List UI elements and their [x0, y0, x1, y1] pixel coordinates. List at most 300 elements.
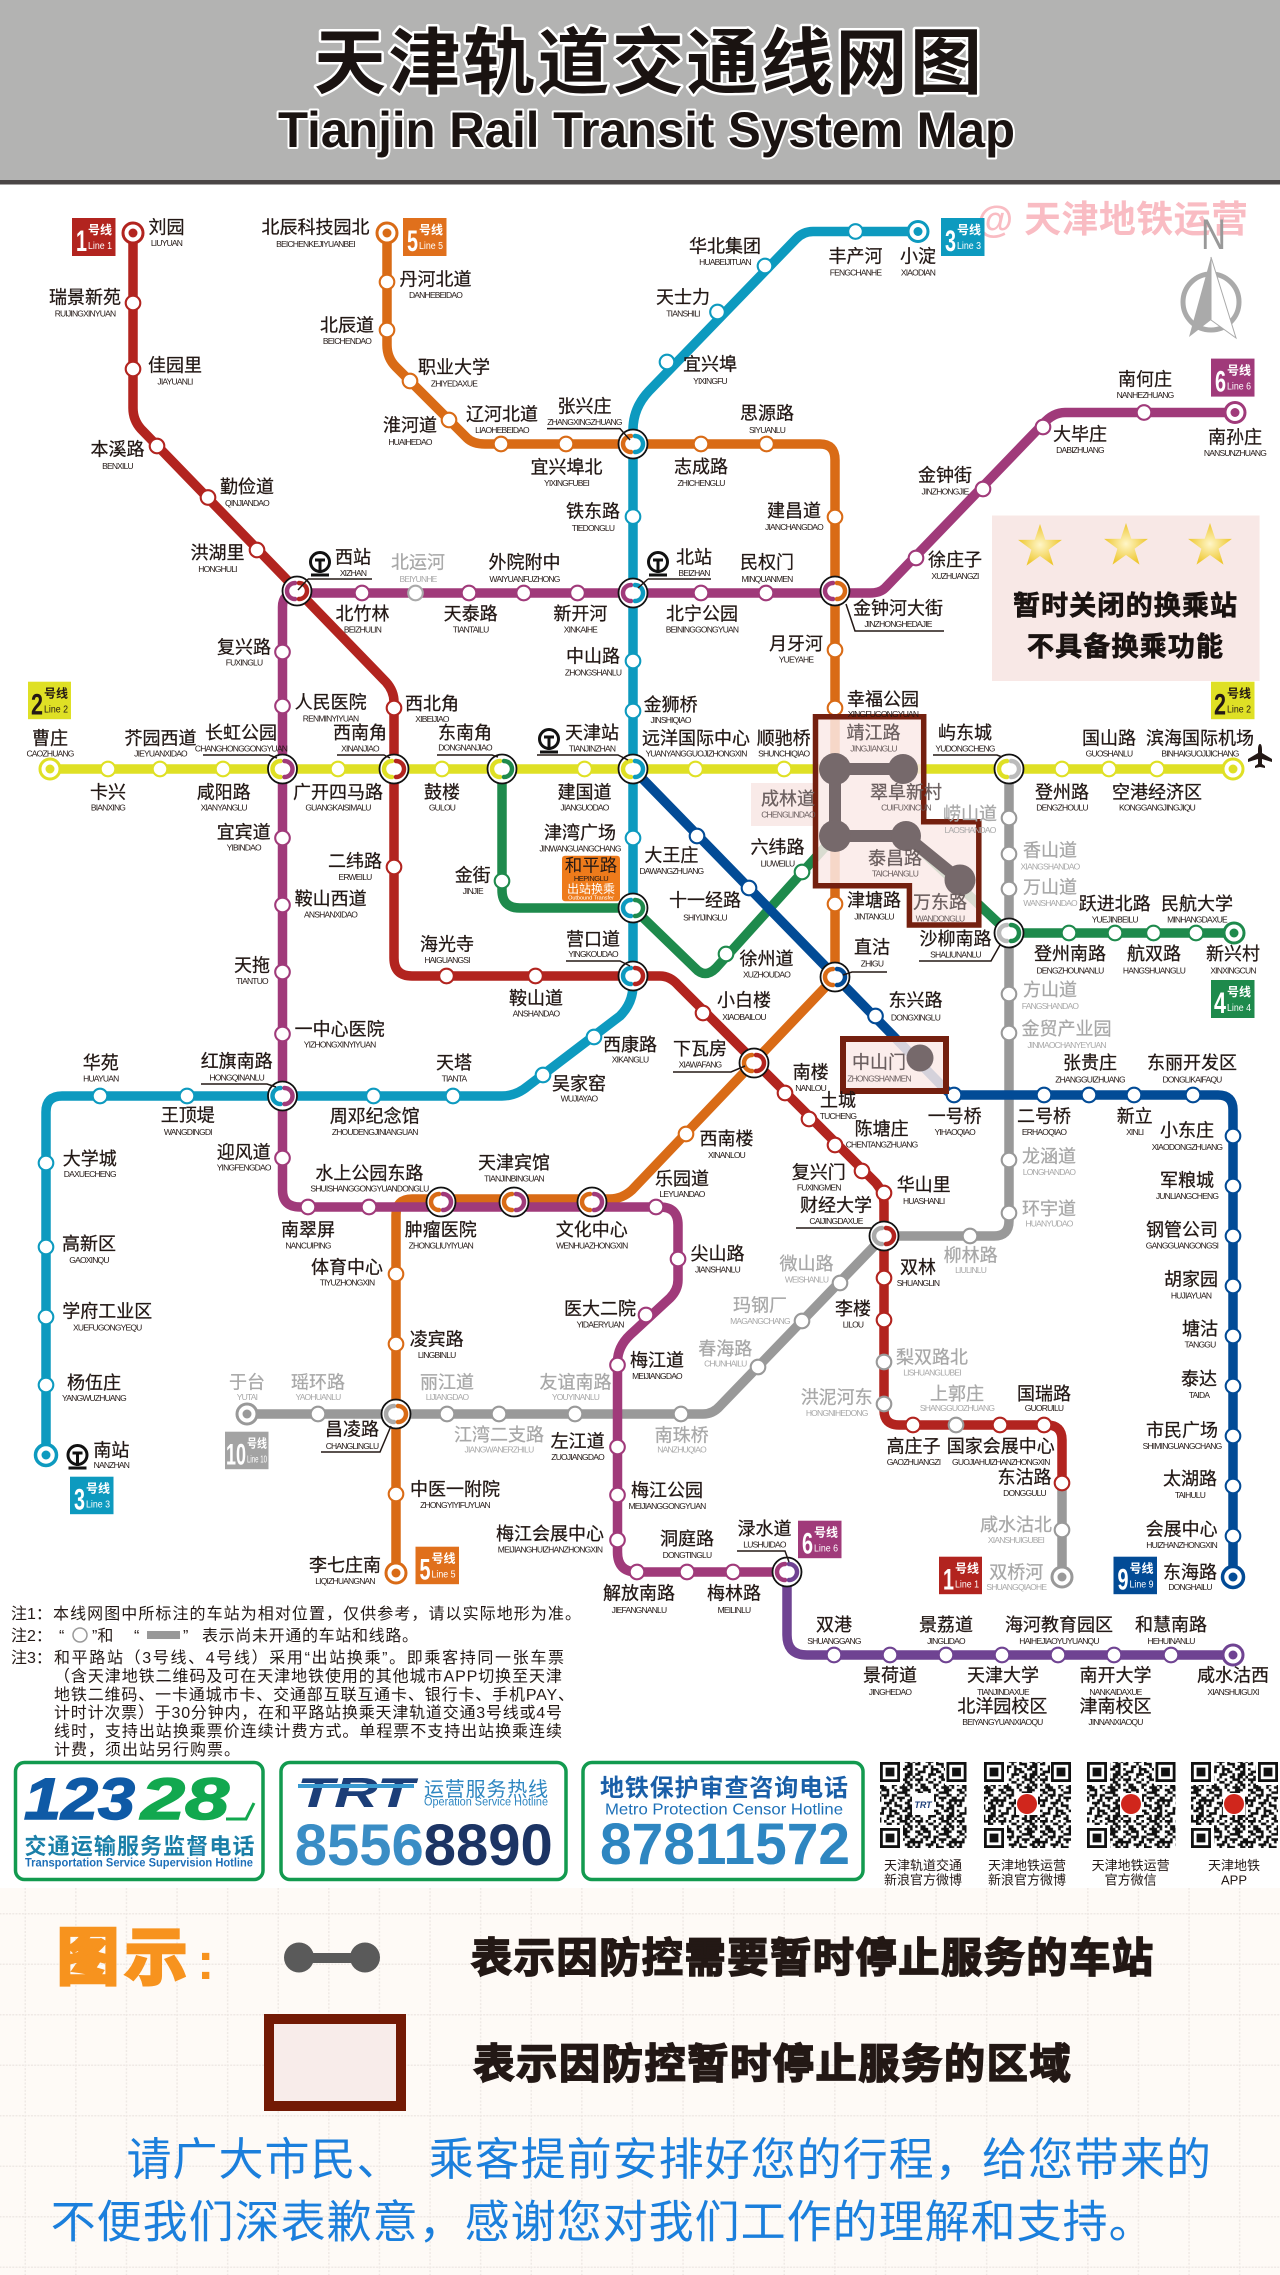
station labels: line 1: 瑞景新苑: [49, 288, 121, 308]
station labels: line 1: BENXILU: [102, 461, 134, 471]
station labels: line 5: LIQIZHUANGNAN: [315, 1576, 375, 1586]
和平路 transfer tag: [562, 856, 620, 902]
badge: line 10: [225, 1432, 268, 1472]
station labels: line 10: JINMAOCHANYEYUAN: [1027, 1040, 1106, 1050]
station labels: line 3: YIXINGFU: [693, 376, 728, 386]
station labels: line 4: 成林道: [761, 789, 815, 809]
station labels: line 2: GUANGKAISIMALU: [305, 803, 371, 813]
badge: line 6 south: 号线: [814, 1525, 838, 1540]
station labels: line 6: ZUOJIANGDAO: [551, 1452, 605, 1462]
legend heading: :: [197, 1933, 214, 1991]
icon: three gold stars: [1018, 523, 1232, 566]
line 1 (red): [123, 223, 1072, 1587]
notes: 表示尚未开通的车站和线路。: [202, 1627, 418, 1645]
station labels: line 9: 二号桥: [1017, 1106, 1071, 1126]
station labels: line 5: 体育中心: [311, 1258, 383, 1278]
station labels: line 1: 营口道: [566, 930, 620, 950]
station labels: line 10: 环宇道: [1022, 1199, 1076, 1219]
badge: line 9: 9: [1118, 1564, 1128, 1597]
和平路 transfer tag: 和平路: [565, 856, 618, 876]
station labels: line 9: HUIZHANZHONGXIN: [1146, 1540, 1218, 1550]
station labels: line 5: 宜兴埠北: [530, 458, 602, 478]
notice text: [51, 2134, 1212, 2248]
notice text: 给您带来的: [982, 2134, 1212, 2185]
QR code: rail transit weibo: 新浪官方微博: [884, 1872, 962, 1888]
station labels: line 2: KONGGANGJINGJIQU: [1119, 803, 1196, 813]
station labels: line 3: 西康路: [603, 1035, 657, 1055]
station labels: line 5: 月牙河: [769, 634, 823, 654]
station labels: line 6: 双港: [816, 1615, 852, 1635]
panel: metro protection hotline: 地铁保护审查咨询电话: [600, 1775, 848, 1802]
station labels: line 10: LONGHANDAO: [1023, 1167, 1076, 1177]
station labels: line 4: DENGZHOUNANLU: [1036, 965, 1104, 975]
station labels: line 5: 北辰道: [320, 316, 374, 336]
station labels: line 1: ANSHANDAO: [513, 1009, 561, 1019]
panel: legend and notice background: [0, 1888, 1280, 2275]
no transfer text: 不具备换乘功能: [1027, 632, 1223, 662]
station labels: line 4: 徐州道: [740, 949, 794, 969]
station labels: line 9: SHIYIJINGLU: [683, 913, 727, 923]
badge: line 6: 6: [1215, 366, 1226, 399]
station labels: line 3: 王顶堤: [161, 1106, 215, 1126]
station labels: line 3: 金狮桥: [644, 695, 698, 715]
station labels: line 3: 北站: [676, 548, 712, 568]
badge: line 6: [1211, 359, 1254, 399]
notes: [11, 1605, 581, 1759]
station labels: line 5: 辽河北道: [466, 404, 538, 424]
QR code: metro weibo: [982, 1760, 1074, 1888]
station labels: line 2: GUOSHANLU: [1086, 749, 1133, 759]
station labels: line 6: ANSHANXIDAO: [304, 910, 358, 920]
station labels: line 6: SHUANGGANG: [807, 1636, 861, 1646]
station labels: line 6: JIEFANGNANLU: [612, 1605, 667, 1615]
station labels: line 9: 张贵庄: [1063, 1053, 1117, 1073]
station labels: line 6: JINGHEDAO: [869, 1687, 912, 1697]
notes: 计费，须出站另行购票。: [54, 1741, 240, 1759]
station labels: line 3: 小淀: [900, 246, 936, 266]
station labels: line 3: YANGWUZHUANG: [62, 1393, 126, 1403]
station labels: line 4: 万东路: [913, 892, 967, 912]
station labels: line 9: 小东庄: [1160, 1120, 1214, 1140]
panel: metro protection hotline: 87811572: [600, 1812, 850, 1877]
station labels: line 10: XIANGSHANDAO: [1021, 861, 1081, 871]
station labels: line 6: 金钟街: [918, 466, 972, 486]
station labels: line 9: 泰达: [1181, 1369, 1217, 1389]
station labels: line 1: 高庄子: [886, 1436, 940, 1456]
station labels: line 9: ERHAOQIAO: [1022, 1127, 1067, 1137]
station labels: line 3: XIAODIAN: [901, 268, 936, 278]
station labels: line 4: YUEJINBEILU: [1092, 915, 1138, 925]
station labels: line 6: 景荔道: [919, 1615, 973, 1635]
station labels: line 6: JINGLIDAO: [927, 1636, 966, 1646]
icon: railway station symbols: [68, 552, 668, 1468]
station labels: line 10: LIULINLU: [955, 1265, 987, 1275]
station labels: line 6: 西站: [335, 548, 371, 568]
station labels: line 9: TAIDA: [1189, 1390, 1210, 1400]
station labels: line 2: JINGJIANGLU: [850, 744, 897, 754]
station labels: line 5: 幸福公园: [847, 690, 919, 710]
station labels: line 4: XUZHOUDAO: [743, 970, 791, 980]
station labels: line 5: LINGBINLU: [418, 1350, 456, 1360]
station labels: line 6: 梅江道: [630, 1350, 684, 1370]
station labels: line 6: RENMINYIYUAN: [303, 713, 359, 723]
station labels: line 1: NANLOU: [795, 1083, 827, 1093]
station labels: line 9: DONGXINGLU: [891, 1013, 941, 1023]
icon: airplane: [1248, 744, 1272, 768]
station labels: line 2: 国山路: [1082, 728, 1136, 748]
badge: line 5: Line 5: [419, 241, 443, 252]
station labels: line 6: 渌水道: [738, 1519, 792, 1539]
station labels: line 10: WEISHANLU: [785, 1275, 829, 1285]
badge: line 3 south: 3: [74, 1484, 85, 1517]
station labels: line 6: HEHUINANLU: [1147, 1636, 1195, 1646]
station labels: line 2: 卡兴: [90, 782, 126, 802]
QR code: rail transit weibo: [878, 1760, 969, 1888]
station labels: line 10: CHUNHAILU: [704, 1359, 747, 1369]
badge: line 10: 10: [226, 1439, 246, 1472]
station labels: line 3: 学府工业区: [62, 1302, 152, 1322]
station labels: line 6: FUXINGLU: [226, 658, 263, 668]
panel: closed interchange note: [992, 516, 1260, 681]
badge: line 2 east: 号线: [1227, 686, 1251, 701]
station labels: line 3: 南站: [93, 1440, 129, 1460]
station labels: line 4: SHALIUNANLU: [930, 950, 982, 960]
station labels: line 10: JIANGWANERZHILU: [465, 1445, 534, 1455]
badge: line 3 south: Line 3: [86, 1500, 110, 1511]
station labels: line 3: NANZHAN: [94, 1460, 130, 1470]
station labels: line 6: 南开大学: [1080, 1666, 1152, 1686]
station labels: line 9: DONGHAILU: [1168, 1582, 1212, 1592]
station labels: line 6: YIDAERYUAN: [576, 1320, 624, 1330]
station labels: line 5: 中医一附院: [410, 1480, 500, 1500]
station labels: line 3: BEIZHAN: [678, 568, 710, 578]
station labels: line 1: JIAYUANLI: [157, 377, 193, 387]
closed area: 中山门 box: [843, 1039, 946, 1091]
station labels: line 1: LIUYUAN: [151, 238, 183, 248]
station labels: line 2: 芥园西道: [124, 728, 196, 748]
badge: line 1: Line 1: [88, 241, 112, 252]
station labels: line 6: 迎风道: [217, 1142, 271, 1162]
badge: line 1 south: 号线: [955, 1561, 979, 1576]
station labels: line 2: 靖江路: [846, 723, 900, 743]
station labels: line 6: 梅江公园: [631, 1480, 703, 1500]
station labels: line 6: 人民医院: [295, 692, 367, 712]
badge: line 1: [72, 218, 116, 258]
badge: line 5: 号线: [419, 222, 443, 237]
station labels: line 3: 华苑: [83, 1053, 119, 1073]
legend icon: closed station dumbbell: [284, 1942, 380, 1972]
station labels: line 5: ZHICHENGLU: [677, 478, 725, 488]
station labels: line 5: 文化中心: [556, 1220, 628, 1240]
station labels: line 5: TIANJINBINGUAN: [484, 1174, 544, 1184]
station labels: line 10: FANGSHANDAO: [1022, 1001, 1079, 1011]
interchange stations: [268, 430, 1024, 1586]
station labels: line 10: 龙涵道: [1022, 1146, 1076, 1166]
badge: line 5 south: Line 5: [432, 1570, 456, 1581]
station labels: line 6: 北宁公园: [666, 604, 738, 624]
line 6 (purple): [275, 402, 1245, 1665]
line 5 (orange): [377, 223, 842, 1583]
station labels: line 10: YAOHUANLU: [295, 1392, 341, 1402]
station labels: line 6: XIANSHUIGUXI: [1207, 1687, 1259, 1697]
station labels: line 1: FUXINGMEN: [797, 1183, 841, 1193]
station labels: line 9: 十一经路: [669, 890, 741, 910]
notes: 线时，支持出站换乘票价连续计费方式。单程票不支持出站换乘连续: [54, 1722, 562, 1740]
badge: line 3 south: 号线: [86, 1481, 110, 1496]
station labels: line 2: GULOU: [429, 803, 456, 813]
station labels: line 6: 梅林路: [707, 1584, 761, 1604]
badge: line 2 east: [1211, 682, 1254, 722]
badge: line 10: Line 10: [247, 1455, 267, 1466]
station labels: line 3: 红旗南路: [201, 1052, 273, 1072]
badge: line 2 west: 号线: [44, 686, 68, 701]
QR code: metro app: 天津地铁: [1208, 1858, 1260, 1873]
station labels: line 1: 本溪路: [90, 440, 144, 460]
station labels: line 5: BEICHENKEJIYUANBEI: [276, 239, 355, 249]
QR code: metro app: [1189, 1760, 1280, 1888]
station labels: line 10: YUTAI: [237, 1392, 258, 1402]
station labels: line 5: 凌宾路: [410, 1330, 464, 1350]
和平路 transfer tag: Outbound Transfer: [568, 896, 614, 902]
station labels: line 3: 吴家窑: [552, 1074, 606, 1094]
station labels: line 2: YUANYANGGUOJIZHONGXIN: [645, 749, 747, 759]
station labels: line 5: 西南楼: [700, 1129, 754, 1149]
station labels: line 6: 北运河: [391, 552, 445, 572]
station labels: line 3: 铁东路: [566, 502, 620, 522]
station labels: line 1: 西南角: [333, 723, 387, 743]
station labels: line 1: XIBEIJIAO: [415, 714, 450, 724]
station labels: line 6: 天拖: [234, 956, 270, 976]
station labels: line 4: 金街: [455, 866, 491, 886]
station labels: line 9: SHIMINGUANGCHANG: [1143, 1441, 1222, 1451]
station labels: line 1: 下瓦房: [673, 1039, 727, 1059]
station labels: line 6: 左江道: [551, 1432, 605, 1452]
station labels: line 3: [62, 236, 936, 1470]
station labels: line 1: 国瑞路: [1017, 1384, 1071, 1404]
station labels: line 2: 翠阜新村: [870, 782, 942, 802]
station labels: line 6: BEIYANGYUANXIAOQU: [962, 1717, 1043, 1727]
station labels: line 1: HONGNIHEDONG: [806, 1408, 868, 1418]
station labels: line 6: MEIJIANGGONGYUAN: [629, 1501, 706, 1511]
station labels: line 6: MEIJIANGHUIZHANZHONGXIN: [498, 1545, 603, 1555]
legend icon: closed area box: [269, 2019, 401, 2106]
station labels: line 2: 顺驰桥: [757, 728, 811, 748]
station labels: line 6: 鞍山西道: [295, 889, 367, 909]
panel: metro protection hotline: [583, 1762, 863, 1880]
station labels: line 2: CHANGHONGGONGYUAN: [195, 744, 288, 754]
station labels: line 2: 长虹公园: [205, 723, 277, 743]
station labels: line 4: 登州南路: [1034, 944, 1106, 964]
station labels: line 4: 民航大学: [1161, 894, 1233, 914]
station labels: line 6: JINNANXIAOQU: [1088, 1717, 1143, 1727]
station labels: line 1: 鞍山道: [509, 988, 563, 1008]
station labels: line 9: YIHAOQIAO: [934, 1127, 976, 1137]
station labels: line 6: HAIHEJIAOYUYUANQU: [1019, 1636, 1099, 1646]
line 2 (yellow): [40, 759, 1243, 779]
station labels: line 10: 春海路: [698, 1339, 752, 1359]
station labels: line 6: NANKAIDAXUE: [1089, 1687, 1143, 1697]
closed interchange text: 暂时关闭的换乘站: [1013, 591, 1237, 621]
station labels: line 1: GUOJIAHUIZHANZHONGXIN: [952, 1457, 1050, 1467]
station labels: line 9: 东海路: [1163, 1562, 1217, 1582]
badge: line 3: 号线: [957, 222, 981, 237]
panel: 12328 hotline: Transportation Service Supervision Hotline: [25, 1858, 253, 1870]
station labels: line 2: JIEYUANXIDAO: [134, 749, 188, 759]
station labels: line 5: 津塘路: [847, 890, 901, 910]
station labels: line 5: YUEYAHE: [779, 655, 814, 665]
station labels: line 4: HANGSHUANGLU: [1123, 965, 1186, 975]
station labels: line 10: NANZHUQIAO: [657, 1445, 707, 1455]
station labels: line 1: LISHUANGLUBEI: [903, 1367, 961, 1377]
station labels: line 10: 丽江道: [420, 1372, 474, 1392]
panel: 12328 hotline: 交通运输服务监督电话: [24, 1834, 254, 1859]
station labels: line 1: 财经大学: [800, 1196, 872, 1216]
station labels: line 6: BEIZHULIN: [344, 625, 382, 635]
station labels: line 5: [262, 218, 943, 1586]
line 9 (dark blue): [633, 769, 1244, 1588]
station labels: line 10: LIJIANGDAO: [426, 1392, 469, 1402]
station labels: line 6: WAIYUANFUZHONG: [489, 574, 560, 584]
station labels: line 1: XINANJIAO: [341, 744, 380, 754]
station labels: line 3: ZHONGSHANLU: [565, 668, 622, 678]
station labels: line 6: LUSHUIDAO: [743, 1540, 787, 1550]
station labels: line 4: TAICHANGLU: [872, 869, 919, 879]
station labels: line 1: YINGKOUDAO: [568, 949, 619, 959]
station labels: line 6: NANSUNZHUANG: [1204, 448, 1266, 458]
station labels: line 5: SIYUANLU: [749, 425, 786, 435]
station labels: line 3: 张兴庄: [558, 396, 612, 416]
station labels: line 5: HUAIHEDAO: [388, 437, 433, 447]
legend text: closed station: 表示因防控需要暂时停止服务的车站: [471, 1935, 1153, 1981]
station labels: line 9: TANGGU: [1185, 1340, 1216, 1350]
closed area: north section box: [816, 717, 979, 925]
station labels: line 6: BEIYUNHE: [399, 574, 438, 584]
station labels: line 6: JIANSHANLU: [695, 1265, 741, 1275]
station labels: line 2: [26, 723, 1254, 813]
station labels: line 2: XIANYANGLU: [201, 803, 247, 813]
station labels: line 3: JINWANGUANGCHANG: [539, 844, 621, 854]
station labels: line 5: LEYUANDAO: [659, 1189, 706, 1199]
station labels: line 1: 国家会展中心: [947, 1436, 1055, 1456]
closed stations: dumbbell markers: [819, 753, 976, 1072]
QR code: metro wechat: 天津地铁运营: [1092, 1858, 1170, 1873]
station labels: line 5: 肿瘤医院: [405, 1220, 477, 1240]
station labels: line 1: 佳园里: [148, 356, 202, 376]
station labels: line 1: CHENTANGZHUANG: [846, 1140, 918, 1150]
station labels: line 5: XINGFUGONGYUAN: [848, 709, 919, 719]
station labels: line 3: JINSHIQIAO: [651, 715, 692, 725]
station labels: line 2: 广开四马路: [293, 782, 383, 802]
legend heading: 图示: [57, 1924, 193, 1993]
badge: line 3: [941, 218, 984, 258]
notice text: 乘客提前安排好您的行程，: [429, 2134, 981, 2185]
station labels: line 10: YOUYINANLU: [552, 1392, 600, 1402]
station labels: line 2: 东南角: [438, 723, 492, 743]
station labels: line 6: XUZHUANGZI: [931, 571, 979, 581]
icon: north compass: [1183, 211, 1239, 338]
station labels: line 6: TIANTUO: [236, 976, 269, 986]
station labels: line 3: 津湾广场: [544, 823, 616, 843]
badge: line 1: 1: [76, 225, 87, 258]
badge: line 2 west: [28, 682, 71, 722]
station labels: line 1: 洪湖里: [190, 543, 244, 563]
station labels: line 5: 思源路: [740, 404, 794, 424]
station labels: line 3: ZHANGXINGZHUANG: [547, 417, 622, 427]
station labels: line 9: [639, 846, 1237, 1592]
station labels: line 1: SHUANGQIAOHE: [986, 1582, 1047, 1592]
station labels: line 6: 解放南路: [603, 1584, 675, 1604]
station labels: line 1: 刘园: [148, 218, 184, 238]
station labels: line 6: 南何庄: [1118, 370, 1172, 390]
station labels: line 5: JINTANGLU: [854, 911, 894, 921]
station labels: line 1: CAIJINGDAXUE: [809, 1216, 864, 1226]
notes: （含天津地铁二维码及可在天津地铁使用的其他城市APP切换至天津: [54, 1668, 562, 1686]
station labels: line 6: TIANTAILU: [453, 625, 489, 635]
station labels: line 5: 建昌道: [767, 501, 821, 521]
panel: TRT service hotline: TRT: [297, 1769, 419, 1816]
station labels: line 1: 南楼: [793, 1062, 829, 1082]
station labels: line 1: 西北角: [405, 694, 459, 714]
legend text: closed area: 表示因防控暂时停止服务的区域: [474, 2041, 1070, 2087]
station labels: line 1: SHUANGLIN: [897, 1278, 940, 1288]
notes: 计时计次票）于30分钟内，在和平路站换乘天津轨道交通3号线或4号: [54, 1704, 562, 1722]
station labels: line 9: XINLI: [1126, 1127, 1144, 1137]
station labels: line 9: 东丽开发区: [1147, 1053, 1237, 1073]
station labels: line 1: 勤俭道: [220, 477, 274, 497]
station labels: line 1: 洪泥河东: [801, 1388, 873, 1408]
QR code: metro weibo: 新浪官方微博: [988, 1872, 1066, 1888]
station labels: line 3: 丰产河: [828, 246, 882, 266]
station labels: line 10: LAOSHANDAO: [944, 825, 997, 835]
notes: “: [134, 1628, 139, 1645]
station labels: line 9: 塘沽: [1182, 1319, 1218, 1339]
station labels: line 10: 微山路: [780, 1254, 834, 1274]
station labels: line 3: HONGQINANLU: [209, 1073, 265, 1083]
station labels: line 1: [49, 218, 1071, 1592]
badge: line 9: [1114, 1557, 1157, 1597]
badge: line 6: 号线: [1227, 363, 1251, 378]
station labels: line 6: 北洋园校区: [957, 1696, 1047, 1716]
station labels: line 5: ZHIGU: [861, 959, 884, 969]
station labels: line 4: XINXINGCUN: [1210, 965, 1256, 975]
notes: ”和: [92, 1627, 113, 1645]
station labels: line 10: HUANYUDAO: [1025, 1219, 1074, 1229]
notice text: 请广大市民、: [126, 2134, 403, 2185]
station labels: line 6: 海河教育园区: [1005, 1615, 1113, 1635]
station labels: line 9: 钢管公司: [1146, 1220, 1218, 1240]
station labels: line 5: 丹河北道: [400, 270, 472, 290]
badge: line 5 south: 5: [420, 1554, 430, 1587]
station labels: line 3: 天士力: [656, 288, 710, 308]
station labels: line 1: 双林: [900, 1258, 936, 1278]
station labels: line 2: YUDONGCHENG: [935, 744, 995, 754]
station labels: line 6: 民权门: [740, 552, 794, 572]
station labels: line 4: CHENGLINDAO: [761, 810, 816, 820]
station labels: line 4: 泰昌路: [868, 848, 922, 868]
station labels: line 6: MINQUANMEN: [741, 574, 793, 584]
station labels: line 1: XIANSHUIGUBEI: [988, 1535, 1045, 1545]
station labels: line 1: 华山里: [897, 1175, 951, 1195]
station labels: line 3: TIANSHILI: [666, 308, 700, 318]
station labels: line 9: 军粮城: [1160, 1170, 1214, 1190]
station labels: line 4: 沙柳南路: [920, 929, 992, 949]
badge: line 2 east: 2: [1214, 689, 1226, 722]
station labels: line 3: FENGCHANHE: [830, 268, 882, 278]
station labels: line 5: LIAOHEBEIDAO: [475, 425, 530, 435]
station labels: line 2: SHUNCHIQIAO: [758, 749, 810, 759]
badge: line 6 south: 6: [802, 1528, 813, 1561]
station labels: line 6: NANCUIPING: [285, 1241, 331, 1251]
